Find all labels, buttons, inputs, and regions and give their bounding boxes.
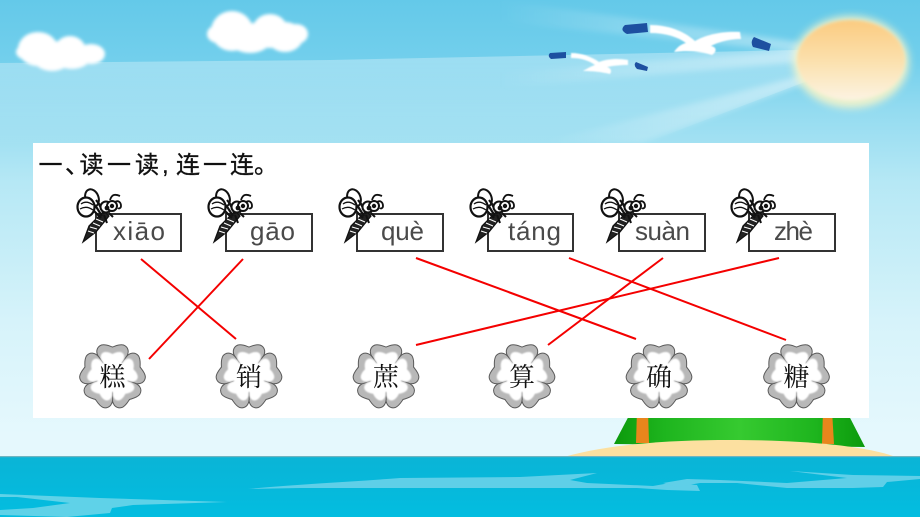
bird: large seagull [622, 23, 771, 55]
pinyin card: suàn [602, 187, 705, 251]
pinyin card: què [340, 187, 443, 251]
pinyin card: suàn: suàn [635, 216, 690, 246]
flower: 糕 [78, 345, 147, 411]
flower: 确 [624, 345, 694, 411]
island [564, 410, 896, 457]
pinyin card: xiāo: xiāo [113, 216, 165, 246]
pinyin card: táng: táng [508, 216, 561, 246]
cloud: right [207, 11, 308, 53]
pinyin card: xiāo [78, 187, 181, 251]
panel: exercise card [33, 143, 869, 418]
flower: 糕: 糕 [99, 357, 126, 394]
sea [0, 456, 920, 517]
flower: 算: 算 [509, 357, 535, 394]
pinyin card: què: què [381, 216, 424, 246]
flower: 蔗: 蔗 [373, 357, 400, 394]
pinyin card: gāo [208, 187, 312, 251]
flower: 糖: 糖 [783, 357, 810, 394]
sky light rays [0, 0, 810, 145]
pinyin card: gāo: gāo [250, 216, 295, 246]
flower: 糖 [762, 345, 831, 411]
pinyin card: táng [470, 187, 573, 251]
pinyin card: zhè: zhè [774, 216, 813, 246]
flower: 确: 确 [646, 357, 672, 394]
flower: 蔗 [351, 345, 421, 411]
bird: small seagull [549, 52, 648, 74]
flower: 销: 销 [236, 357, 262, 394]
title: 一、读一读,连一连。 [38, 152, 278, 179]
flower: 算 [487, 345, 557, 411]
cloud: left [16, 32, 105, 71]
answer lines [141, 258, 786, 359]
flower: 销 [214, 345, 284, 411]
pinyin card: zhè [732, 187, 835, 251]
sun [793, 16, 909, 108]
